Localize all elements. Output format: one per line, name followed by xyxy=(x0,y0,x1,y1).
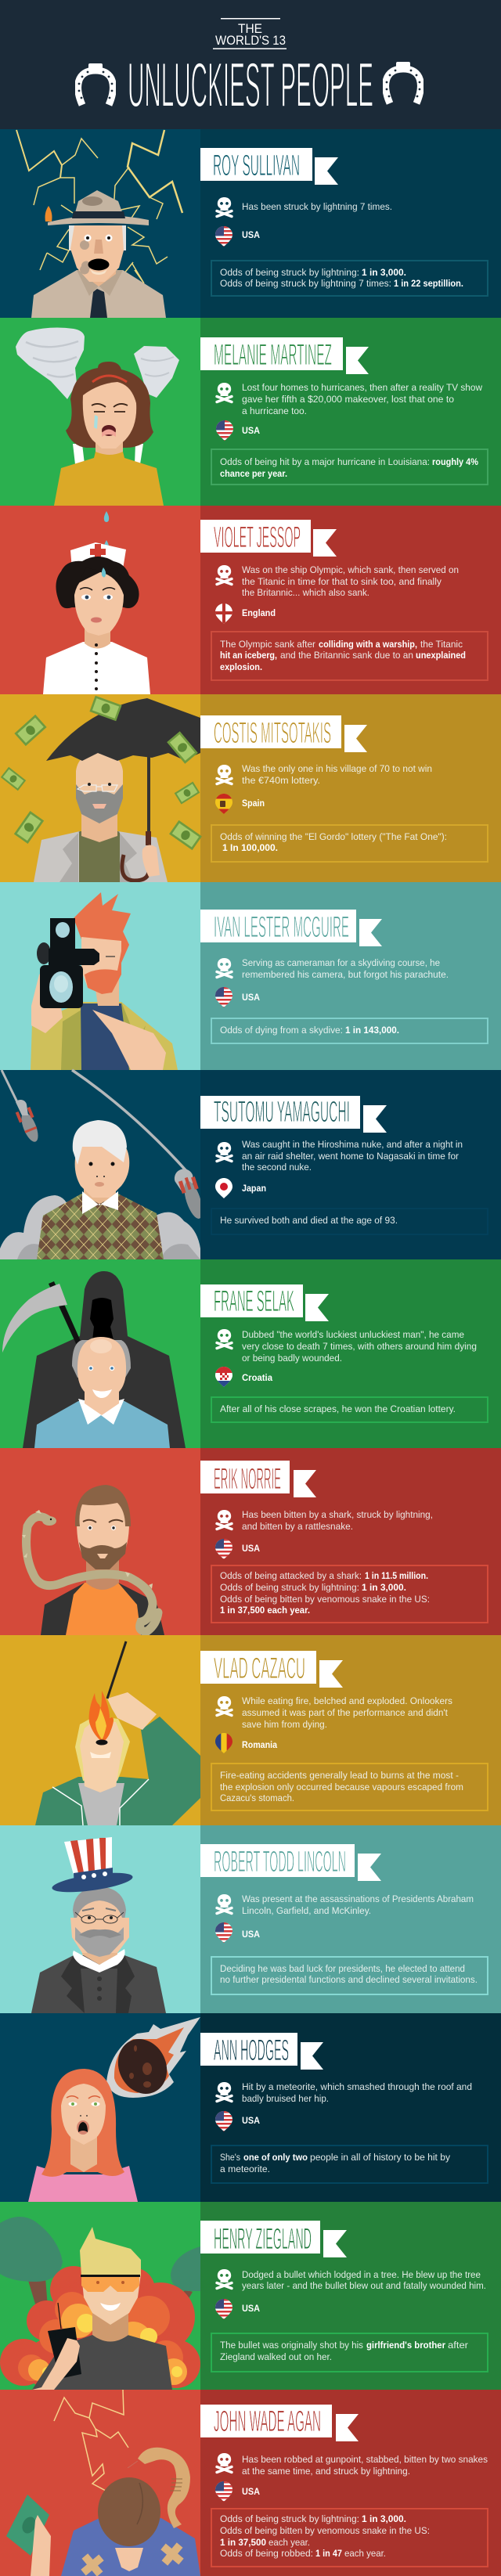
name ribbon: VIOLET JESSOP xyxy=(214,521,301,554)
description xyxy=(242,564,459,598)
odds box: after xyxy=(448,2340,468,2351)
panel: Tsutomu Yamaguchi xyxy=(0,1070,501,1259)
name ribbon xyxy=(200,2221,347,2257)
description: assumed it was part of the performance and didn't xyxy=(242,1707,449,1718)
illustration: Tsutomu Yamaguchi with bombs xyxy=(0,1070,207,1259)
odds box: Odds of dying from a skydive: xyxy=(220,1025,343,1036)
description: a hurricane too. xyxy=(242,405,307,416)
description: badly bruised her hip. xyxy=(242,2093,329,2104)
odds box xyxy=(211,2509,488,2567)
odds box: girlfriend's brother xyxy=(366,2340,445,2351)
odds box: He survived both and died at the age of 93. xyxy=(220,1215,398,1226)
panel: Melanie Martinez xyxy=(0,318,501,506)
name ribbon: MELANIE MARTINEZ xyxy=(214,339,332,372)
name ribbon xyxy=(200,1844,381,1881)
panel: Roy Sullivan xyxy=(0,129,501,318)
description: or being badly wounded. xyxy=(242,1353,342,1364)
icon: skull xyxy=(217,958,232,977)
name ribbon: HENRY ZIEGLAND xyxy=(214,2223,312,2256)
description: Was on the ship Olympic, which sank, then served on xyxy=(242,564,459,575)
description xyxy=(242,1139,463,1173)
icon: skull xyxy=(217,565,232,584)
illustration: Ann Hodges and meteorite xyxy=(28,2017,200,2202)
odds box xyxy=(211,1018,488,1043)
odds box: Fire-eating accidents generally lead to burns at the most - xyxy=(220,1770,459,1781)
illustration: Roy Sullivan with lightning xyxy=(16,130,182,318)
name ribbon xyxy=(200,910,382,946)
odds box: Odds of winning the "El Gordo" lottery ("The Fat One"): xyxy=(220,831,447,842)
description: the second nuke. xyxy=(242,1162,312,1173)
icon: USA pin xyxy=(215,1539,232,1561)
icon: skull xyxy=(217,1510,232,1529)
name ribbon: FRANE SELAK xyxy=(214,1285,294,1318)
country: USA xyxy=(242,229,260,240)
icon: Croatia pin xyxy=(215,1367,232,1387)
panel: Frane Selak xyxy=(0,1259,501,1448)
odds box: Odds of being bitten by venomous snake in the US: xyxy=(220,1594,430,1605)
description: save him from dying. xyxy=(242,1719,327,1730)
odds box: Ziegland walked out on her. xyxy=(220,2351,332,2362)
description xyxy=(242,1329,477,1364)
description: While eating fire, belched and exploded. Onlookers xyxy=(242,1695,452,1706)
icon: Spain pin xyxy=(215,794,232,814)
country: USA xyxy=(242,1543,260,1554)
description: Lincoln, Garfield, and McKinley. xyxy=(242,1905,371,1916)
icon: skull xyxy=(217,1894,232,1913)
odds box xyxy=(211,261,488,296)
odds box: each year. xyxy=(269,2537,310,2548)
odds box: the explosion only occurred because vapours escaped from xyxy=(220,1782,463,1792)
odds box: Odds of being struck by lightning: xyxy=(220,267,359,278)
name ribbon xyxy=(200,1461,316,1497)
icon: USA pin xyxy=(215,226,232,247)
description: very close to death 7 times, with others around him dying xyxy=(242,1341,477,1352)
odds box xyxy=(211,632,488,680)
name ribbon: JOHN WADE AGAN xyxy=(214,2405,321,2438)
description: gave her fifth a $20,000 makeover, lost that one to xyxy=(242,394,454,405)
country: Romania xyxy=(242,1739,277,1750)
icon: Romania pin xyxy=(215,1733,232,1753)
odds box: Odds of being attacked by a shark: xyxy=(220,1570,362,1581)
odds box xyxy=(211,1397,488,1422)
odds box: 1 in 143,000. xyxy=(345,1025,399,1036)
description: Serving as cameraman for a skydiving course, he xyxy=(242,957,440,968)
description xyxy=(242,2454,488,2477)
panel: John Wade Agan xyxy=(0,2390,501,2576)
odds box: Odds of being struck by lightning 7 times: xyxy=(220,278,391,289)
odds box: people in all of history to be hit by xyxy=(310,2152,451,2163)
illustration: Melanie Martinez with tornadoes xyxy=(16,328,179,506)
odds box: The Olympic sank after xyxy=(220,639,315,650)
country: USA xyxy=(242,2486,260,2497)
odds box xyxy=(211,2333,488,2372)
illustration: Robert Todd Lincoln with top hat xyxy=(31,1837,166,2013)
odds box xyxy=(211,1957,488,1994)
odds box: 1 in 47 xyxy=(315,2548,342,2559)
odds box: unexplained xyxy=(416,650,466,661)
odds box: a meteorite. xyxy=(220,2163,270,2174)
panel: Robert Todd Lincoln xyxy=(0,1825,501,2013)
description: years later - and the bullet blew out and fatally wounded him. xyxy=(242,2280,486,2291)
illustration: Vlad Cazacu fire eating xyxy=(35,1641,200,1825)
icon: USA pin xyxy=(215,1922,232,1944)
country: Spain xyxy=(242,798,265,809)
name ribbon xyxy=(200,148,338,185)
country: USA xyxy=(242,2115,260,2126)
odds box: Deciding he was bad luck for presidents, he elected to attend xyxy=(220,1963,465,1974)
name ribbon xyxy=(200,520,337,557)
odds box: The bullet was originally shot by his xyxy=(220,2340,363,2351)
name ribbon xyxy=(200,2405,359,2441)
odds box: 1 in 37,500 each year. xyxy=(220,1605,310,1616)
odds box xyxy=(211,1209,488,1234)
icon: skull xyxy=(217,1696,232,1716)
description: Has been struck by lightning 7 times. xyxy=(242,201,392,212)
name ribbon: ERIK NORRIE xyxy=(214,1463,281,1496)
country: USA xyxy=(242,425,260,436)
description: Dubbed "the world's luckiest unluckiest man", he came xyxy=(242,1329,464,1340)
odds box: each year. xyxy=(344,2548,386,2559)
icon: right horseshoe xyxy=(386,62,420,103)
odds box: Odds of being struck by lightning: xyxy=(220,2513,359,2524)
name ribbon: ANN HODGES xyxy=(214,2034,289,2067)
odds box: 1 in 3,000. xyxy=(362,2513,406,2524)
odds box: hit an iceberg, xyxy=(220,650,277,661)
icon: skull xyxy=(217,2269,232,2289)
icon: USA pin xyxy=(215,2481,232,2503)
description: the Britannic... which also sank. xyxy=(242,587,369,598)
name ribbon xyxy=(200,1284,329,1321)
odds box: 1 in 3,000. xyxy=(362,267,406,278)
name ribbon xyxy=(200,337,369,374)
odds box xyxy=(211,1764,488,1810)
name ribbon: ROY SULLIVAN xyxy=(213,150,300,182)
odds box: 1 In 100,000. xyxy=(222,842,278,853)
kicker: the world's 13: WORLD'S 13 xyxy=(215,34,286,48)
description: Has been robbed at gunpoint, stabbed, bitten by two snakes xyxy=(242,2454,488,2465)
description: at the same time, and struck by lightning. xyxy=(242,2466,410,2477)
odds box xyxy=(211,449,488,485)
icon: USA pin xyxy=(215,2111,232,2132)
panel: Vlad Cazacu xyxy=(0,1635,501,1825)
description: remembered his camera, but forgot his parachute. xyxy=(242,969,449,980)
odds box: She's xyxy=(220,2152,240,2163)
odds box: Odds of being robbed: xyxy=(220,2548,313,2559)
illustration: Erik Norrie with snake xyxy=(22,1485,164,1635)
description xyxy=(242,2269,486,2291)
description: Lost four homes to hurricanes, then after a reality TV show xyxy=(242,382,482,393)
odds box: explosion. xyxy=(220,661,262,672)
illustration: Costis Mitsotakis with umbrella and money xyxy=(1,696,202,882)
description: Dodged a bullet which lodged in a tree. He blew up the tree xyxy=(242,2269,481,2280)
icon: skull xyxy=(217,1142,232,1162)
icon: skull xyxy=(217,2082,232,2101)
country: USA xyxy=(242,1929,260,1940)
panel: Erik Norrie xyxy=(0,1448,501,1636)
panel: Violet Jessop xyxy=(0,506,501,694)
name ribbon xyxy=(200,1096,387,1133)
icon: skull xyxy=(217,383,232,402)
odds box xyxy=(211,825,488,862)
illustration: Frane Selak with grim reaper xyxy=(2,1271,186,1448)
description: Has been bitten by a shark, struck by lightning, xyxy=(242,1509,433,1520)
icon: skull xyxy=(217,2453,232,2472)
description xyxy=(242,763,432,786)
odds box: Odds of being bitten by venomous snake in the US: xyxy=(220,2525,430,2536)
description xyxy=(242,957,449,980)
country: England xyxy=(242,607,276,618)
description: Was present at the assassinations of Presidents Abraham xyxy=(242,1893,474,1904)
icon: skull xyxy=(217,765,232,784)
odds box: Cazacu's stomach. xyxy=(220,1792,294,1803)
illustration: Ivan Lester McGuire with camera xyxy=(31,892,178,1070)
description xyxy=(242,1509,433,1532)
icon: England pin xyxy=(215,603,232,624)
icon: Japan pin xyxy=(215,1178,232,1198)
icon: USA pin xyxy=(215,2299,232,2320)
name ribbon xyxy=(200,1651,343,1688)
odds box: roughly 4% xyxy=(432,456,478,467)
description xyxy=(242,1893,474,1916)
odds box: 1 in 37,500 xyxy=(220,2537,266,2548)
description: Hit by a meteorite, which smashed through the roof and xyxy=(242,2081,472,2092)
odds box xyxy=(211,2145,488,2183)
name ribbon: VLAD CAZACU xyxy=(214,1652,305,1685)
icon: USA pin xyxy=(215,987,232,1008)
country: Croatia xyxy=(242,1372,272,1383)
odds box: colliding with a warship, xyxy=(319,639,417,650)
odds box xyxy=(211,1565,488,1623)
name ribbon xyxy=(200,2033,323,2070)
description: an air raid shelter, went home to Nagasaki in time for xyxy=(242,1151,459,1162)
odds box: one of only two xyxy=(243,2152,308,2163)
odds box: the Titanic xyxy=(420,639,463,650)
icon: USA pin xyxy=(216,420,233,441)
description: Was caught in the Hiroshima nuke, and after a night in xyxy=(242,1139,463,1150)
icon: left horseshoe xyxy=(78,63,113,105)
description xyxy=(242,2081,472,2104)
odds box: After all of his close scrapes, he won the Croatian lottery. xyxy=(220,1403,456,1414)
icon: skull xyxy=(217,197,232,216)
odds box: chance per year. xyxy=(220,468,287,479)
description xyxy=(242,382,482,416)
odds box: Odds of being hit by a major hurricane in Louisiana: xyxy=(220,456,430,467)
description xyxy=(242,1695,452,1730)
odds box: 1 in 22 septillion. xyxy=(394,278,463,289)
panel: Ann Hodges xyxy=(0,2013,501,2202)
name ribbon xyxy=(200,715,367,752)
country: USA xyxy=(242,2303,260,2314)
kicker: the world's 13: THE xyxy=(238,22,262,36)
panel: Costis Mitsotakis xyxy=(0,694,501,882)
panel: Henry Ziegland xyxy=(0,2202,501,2390)
icon: skull xyxy=(217,1329,232,1348)
illustration: Henry Ziegland with explosion xyxy=(0,2217,200,2390)
kicker: the world's 13 xyxy=(213,18,287,49)
odds box: Odds of being struck by lightning: xyxy=(220,1582,359,1593)
description: and bitten by a rattlesnake. xyxy=(242,1521,353,1532)
odds box: no further presidental functions and declined several invitations. xyxy=(220,1974,478,1985)
header xyxy=(0,0,501,130)
country: USA xyxy=(242,992,260,1003)
panel: Ivan Lester McGuire xyxy=(0,882,501,1070)
odds box: 1 in 11.5 million. xyxy=(365,1570,428,1581)
description: the €740m lottery. xyxy=(242,775,320,786)
description: the Titanic in time for that to sink too, and finally xyxy=(242,576,442,587)
odds box: and the Britannic sank due to an xyxy=(280,650,413,661)
description: Was the only one in his village of 70 to not win xyxy=(242,763,432,774)
odds box: 1 in 3,000. xyxy=(362,1582,406,1593)
country: Japan xyxy=(242,1183,266,1194)
illustration: Violet Jessop nurse xyxy=(43,511,150,694)
illustration: John Wade Agan with snake, lightning and cash xyxy=(6,2390,200,2576)
